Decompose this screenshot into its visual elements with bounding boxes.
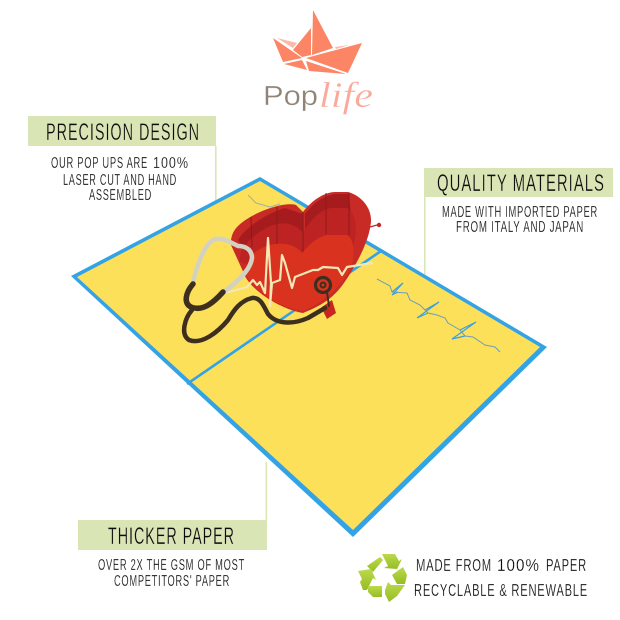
- label: precision design: [28, 116, 216, 204]
- card: open pop-up card: [71, 177, 547, 537]
- heartbeat line on card: [377, 279, 500, 352]
- icon: recycle: [358, 554, 407, 602]
- precision description: LASER CUT AND HAND: [63, 172, 177, 189]
- precision description: ASSEMBLED: [89, 187, 152, 204]
- stethoscope: [184, 238, 372, 341]
- recycled paper message: MADE FROM: [416, 555, 492, 575]
- heart back layer: [231, 192, 371, 313]
- heart middle layer: [240, 208, 356, 280]
- label: quality materials: [424, 168, 613, 236]
- quality description: [442, 204, 598, 236]
- logo: Poplife paper boat: [263, 10, 373, 115]
- heartbeat strip on heart: [225, 238, 372, 306]
- recycled paper message: PAPER: [546, 555, 587, 575]
- label: thicker paper: THICKER PAPER: [108, 523, 235, 550]
- precision description: [51, 155, 189, 204]
- connector lines: [215, 146, 426, 520]
- label: precision design: PRECISION DESIGN: [46, 119, 200, 146]
- recycled paper message: 100%: [497, 555, 540, 575]
- fold line: [187, 251, 381, 384]
- heart front layer: [246, 235, 354, 311]
- logo wordmark: Pop: [263, 80, 318, 111]
- pop-up heart: [231, 192, 381, 319]
- heart ribs: [251, 193, 349, 252]
- heart tab: [322, 300, 336, 319]
- logo: Poplife paper boat: life: [319, 75, 373, 115]
- label: thicker paper: [78, 520, 267, 590]
- precision description: OUR POP UPS ARE: [51, 155, 148, 172]
- thicker description: COMPETITORS' PAPER: [114, 573, 230, 590]
- heart pin: [370, 225, 377, 227]
- precision description: 100%: [153, 155, 189, 172]
- thicker description: [98, 557, 245, 590]
- thicker description: OVER 2X THE GSM OF MOST: [98, 557, 245, 574]
- recycled paper message: [414, 555, 588, 600]
